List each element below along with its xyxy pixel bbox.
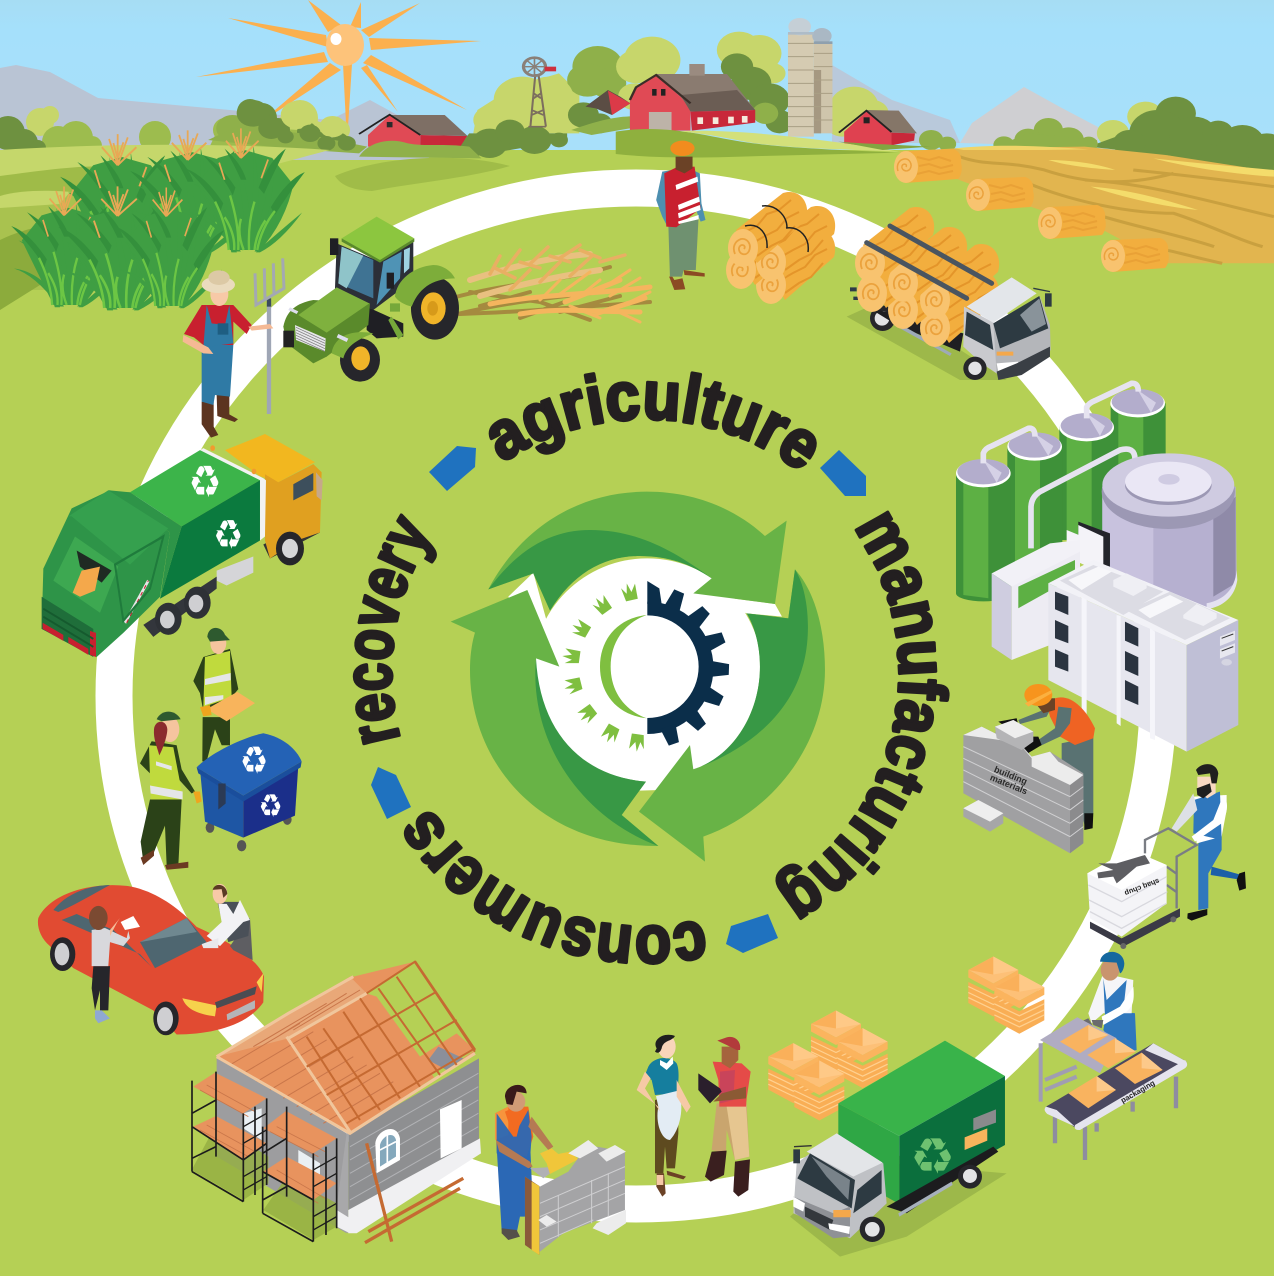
label: packaging: packaging — [1119, 1078, 1157, 1105]
pipes — [983, 383, 1138, 548]
barn right — [839, 110, 917, 145]
central recycle logo — [451, 492, 825, 862]
distant mountains — [0, 65, 1098, 160]
packaging conveyor and table — [1040, 1017, 1187, 1160]
man with a cart — [1172, 764, 1246, 921]
person with a pad, stacks and recycling truck — [637, 1010, 1007, 1257]
hay stack by worker — [726, 192, 835, 304]
recycling and end of life group — [38, 434, 323, 1035]
scaffolding — [192, 1072, 337, 1242]
label: carton text: shaq chup — [1123, 876, 1161, 898]
cart with cartons — [1087, 828, 1197, 949]
walls — [217, 1057, 481, 1233]
top arrow — [488, 492, 787, 611]
trowel and mortar — [530, 1167, 560, 1178]
word ring — [352, 371, 950, 965]
carton stacks — [768, 1010, 888, 1120]
word: consumers: consumers — [404, 812, 706, 965]
storage tank — [1102, 453, 1237, 609]
barn left — [359, 115, 481, 158]
label: building materials: materials — [989, 772, 1029, 796]
white circular road — [114, 188, 1158, 1204]
block wall — [525, 1147, 625, 1252]
second bricklayer — [495, 1085, 626, 1255]
packaging worker — [1077, 952, 1137, 1053]
truck recycle symbols: ♻ — [189, 456, 221, 508]
hay truck — [847, 207, 1052, 380]
house under construction — [192, 962, 481, 1243]
building materials wall — [963, 720, 1083, 853]
word: manufacturing: manufacturing — [775, 510, 950, 920]
orange carton stacks right — [968, 956, 1044, 1034]
timber poles — [365, 1143, 463, 1243]
word: recovery: recovery — [352, 513, 437, 746]
hay rolls in the field — [894, 149, 1169, 272]
golden field — [899, 146, 1274, 263]
blue direction markers — [371, 446, 866, 953]
worker in red vest — [656, 141, 705, 290]
tractor — [283, 217, 459, 382]
roof — [217, 962, 475, 1133]
crescent — [600, 615, 647, 718]
bricklayer — [998, 684, 1095, 830]
green silos — [956, 389, 1166, 601]
recycling symbol on truck: ♻ — [910, 1127, 955, 1185]
right arrow — [639, 569, 825, 862]
factory — [956, 383, 1238, 853]
green recycling truck — [790, 1041, 1007, 1257]
sun — [196, 0, 481, 143]
left arrow — [451, 590, 658, 846]
half gear — [647, 581, 729, 746]
cut crop on the ground — [442, 245, 650, 322]
hill and lane — [616, 129, 931, 157]
cart worker and packaging station — [968, 764, 1246, 1160]
pampas grass — [11, 128, 305, 310]
white process building — [1048, 560, 1238, 752]
main farm group — [616, 18, 1274, 263]
small barn — [571, 90, 640, 135]
hill shadow — [335, 158, 510, 191]
left field stripes — [0, 145, 330, 310]
bin recycle symbols: ♻ — [240, 739, 268, 783]
grain silos — [788, 18, 832, 137]
woman with apron — [637, 1035, 691, 1197]
windmill — [523, 58, 556, 127]
far tree lines left — [0, 99, 350, 158]
man wiping car — [202, 884, 253, 960]
main barn — [630, 64, 755, 131]
woman wiping car — [89, 906, 140, 1023]
near tree clumps — [208, 46, 657, 158]
blue recycling bin: ♻ — [259, 787, 283, 824]
white disc — [508, 558, 782, 791]
grass tufts — [561, 582, 646, 753]
blue recycling bin — [197, 733, 302, 851]
man with clipboard — [698, 1037, 751, 1197]
sky — [0, 0, 1274, 150]
trees behind the main barn — [624, 32, 1274, 175]
air handling unit — [992, 522, 1110, 660]
garbage truck: ♻ — [213, 512, 243, 558]
red car — [38, 885, 264, 1035]
man recycler — [193, 628, 255, 761]
farmer with pitchfork — [183, 258, 284, 438]
label: building materials: building — [993, 764, 1029, 787]
woman recycler — [140, 712, 202, 870]
farmstead group — [208, 46, 657, 158]
word: agriculture: agriculture — [488, 371, 817, 468]
garbage truck — [42, 434, 323, 657]
